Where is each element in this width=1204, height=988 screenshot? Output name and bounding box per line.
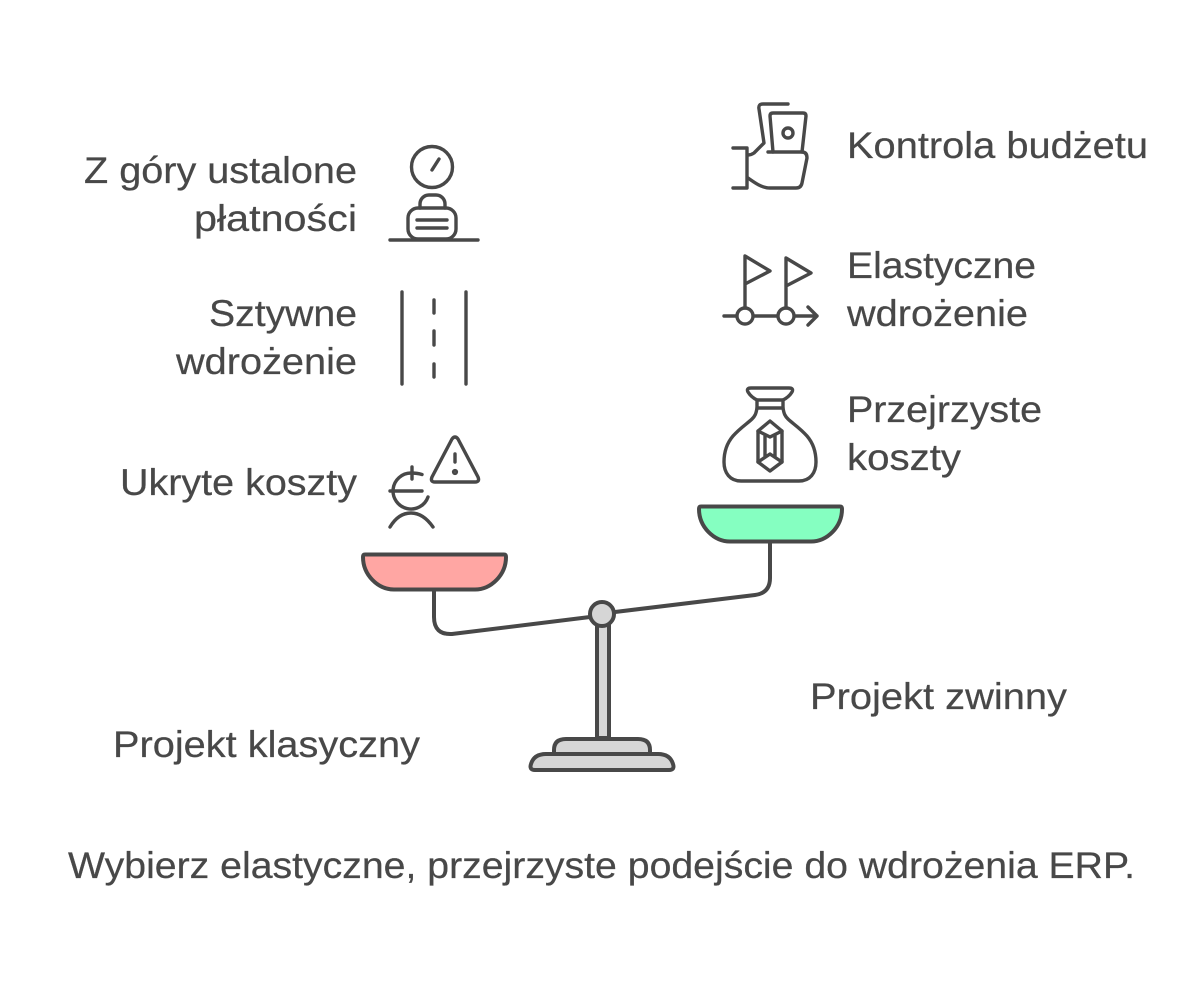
icon: money bag with gem <box>724 388 816 481</box>
text: Z góry ustalone płatności: Z góry ustalone <box>84 149 357 191</box>
text: Ukryte koszty: Ukryte koszty <box>120 461 357 503</box>
scale post <box>597 622 609 738</box>
label: Projekt zwinny: Projekt zwinny <box>810 675 1067 717</box>
icon: hand holding banknotes <box>733 104 807 188</box>
icon: euro person with warning triangle <box>390 437 479 527</box>
text: Kontrola budżetu: Kontrola budżetu <box>847 124 1148 166</box>
right pan: green <box>699 506 842 542</box>
text: Sztywne wdrożenie: wdrożenie <box>175 340 357 382</box>
text: Sztywne wdrożenie: Sztywne <box>209 292 357 334</box>
text: Elastyczne wdrożenie <box>846 244 1036 334</box>
right column: agile project benefits <box>724 104 1148 481</box>
left pan: red <box>363 554 506 590</box>
label: Projekt klasyczny: Projekt klasyczny <box>113 723 420 765</box>
scale beam <box>434 542 770 634</box>
text: Z góry ustalone płatności <box>84 149 357 239</box>
scale pivot <box>590 602 614 626</box>
text: Elastyczne wdrożenie: Elastyczne <box>847 244 1036 286</box>
balance scale <box>363 506 842 770</box>
text: Przejrzyste koszty: Przejrzyste <box>847 388 1042 430</box>
text: Z góry ustalone płatności: płatności <box>194 197 357 239</box>
icon: flags on a timeline <box>724 256 817 325</box>
text: Przejrzyste koszty: koszty <box>847 436 961 478</box>
scale base <box>530 739 674 770</box>
text: Elastyczne wdrożenie: wdrożenie <box>846 292 1028 334</box>
text: Sztywne wdrożenie <box>175 292 357 382</box>
icon: stopwatch and briefcase <box>390 146 478 240</box>
left column: classic project drawbacks <box>84 146 479 527</box>
text: Przejrzyste koszty <box>847 388 1042 478</box>
icon: straight road <box>402 292 466 384</box>
conclusion text: Wybierz elastyczne, przejrzyste podejście do wdrożenia ERP. <box>68 844 1135 886</box>
